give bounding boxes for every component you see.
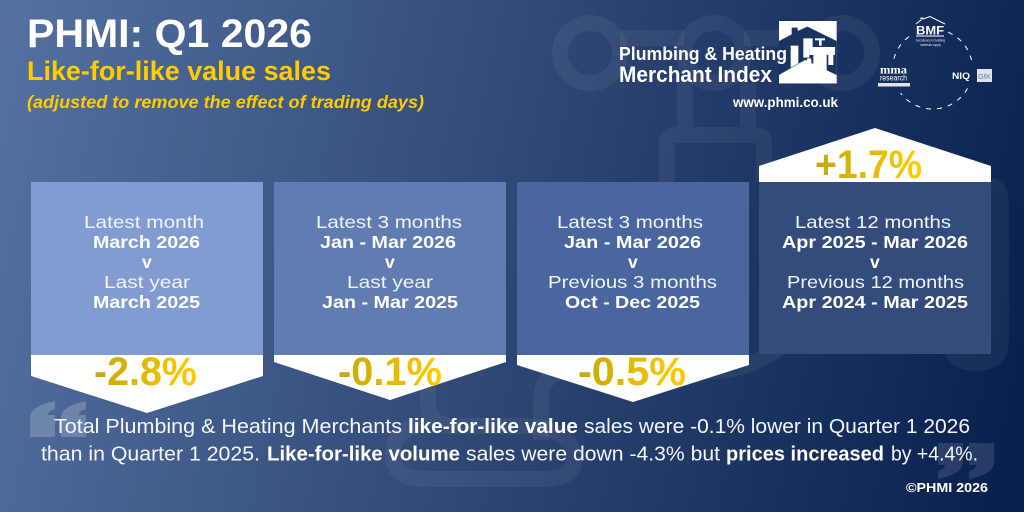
logo: BMF: Excellence in building: [916, 38, 945, 42]
panel text: Latest 3 months: [557, 212, 703, 232]
panel: latest 3 months v last year: Last year: [347, 272, 433, 292]
subtitle: Like-for-like value sales: [27, 56, 331, 86]
summary text: by +4.4%.: [891, 442, 978, 466]
background pipe watermark: [393, 23, 872, 479]
panel: latest 12 months: v: [870, 252, 880, 272]
value: -0.5%: [578, 350, 686, 394]
panel: latest month: March 2026: [93, 232, 200, 252]
value arrow: [31, 355, 263, 413]
copyright: ©PHMI 2026: [906, 480, 988, 495]
panel text: Latest month: [84, 212, 204, 232]
logo wordmark: Plumbing & Heating: [619, 43, 787, 64]
value: +1.7%: [815, 143, 922, 187]
logo: BMF: materials supply: [920, 43, 941, 47]
panel: latest 3 months v last year: Jan - Mar 2025: [322, 292, 458, 312]
summary text: [41, 415, 978, 466]
summary text: prices increased: [726, 442, 884, 466]
website: www.phmi.co.uk: [732, 95, 838, 110]
value: -0.1%: [338, 350, 442, 394]
panel: latest 12 months: Previous 12 months: [787, 272, 964, 292]
summary text: Like-for-like volume: [267, 442, 460, 466]
logo: BMF: [916, 16, 945, 47]
panel: latest 3 months v previous 3 months: v: [628, 252, 638, 272]
icon: closing quote mark: [938, 443, 994, 479]
panel: latest 12 months: [759, 128, 991, 354]
subtitle note: (adjusted to remove the effect of trading days): [27, 92, 424, 112]
panel: latest 3 months v last year: [274, 182, 506, 400]
panel background: [517, 182, 749, 355]
logo: NIQ GfK: [952, 69, 992, 82]
panel: latest 12 months: Apr 2025 - Mar 2026: [782, 232, 968, 252]
value arrow: [517, 355, 749, 402]
value arrow: [274, 355, 506, 400]
panel: latest month: Last year: [104, 272, 190, 292]
panel background: [31, 182, 263, 355]
summary text: like-for-like value: [408, 415, 578, 438]
logo: BMF: BMF: [916, 26, 944, 38]
panel: latest month: March 2025: [93, 292, 200, 312]
panel: latest 3 months v last year: Jan - Mar 2026: [320, 232, 456, 252]
panel text: Latest 12 months: [795, 212, 951, 232]
panel background: [759, 182, 991, 354]
icon: house and tap: [779, 21, 837, 83]
panel: latest 3 months v previous 3 months: [517, 182, 749, 402]
panel: latest month: [31, 182, 263, 413]
summary text: than in Quarter 1 2025.: [41, 442, 260, 466]
panel: latest 12 months: Apr 2024 - Mar 2025: [782, 292, 968, 312]
logo: NIQ GfK: NIQ: [952, 71, 970, 81]
panel: latest month: v: [142, 252, 152, 272]
partner logos ring: [878, 16, 992, 109]
panel: latest 3 months v previous 3 months: Oct - Dec 2025: [565, 292, 700, 312]
logo: mma research: mma: [880, 62, 907, 76]
background pipe fitting: [940, 177, 1009, 371]
summary text: sales were down -4.3% but: [466, 442, 720, 466]
value arrow: [759, 128, 991, 182]
panel: latest 3 months v last year: v: [385, 252, 395, 272]
value: -2.8%: [94, 350, 197, 394]
summary text: Total Plumbing & Heating Merchants: [54, 415, 402, 438]
panel text: Latest 3 months: [316, 212, 462, 232]
summary text: sales were -0.1% lower in Quarter 1 2026: [584, 415, 970, 438]
logo: Plumbing and Heating Merchant Index: Merchant Index: [619, 62, 773, 87]
logo: Plumbing and Heating Merchant Index: [619, 21, 838, 110]
icon: opening quote mark: [30, 401, 86, 437]
logo: NIQ GfK: GfK: [978, 74, 991, 81]
dashed ring: [894, 32, 972, 109]
panel: latest 3 months v previous 3 months: Jan - Mar 2026: [564, 232, 701, 252]
panel: latest 3 months v previous 3 months: Previous 3 months: [548, 272, 717, 292]
panel background: [274, 182, 506, 355]
logo: mma research: [878, 62, 910, 86]
title: PHMI: Q1 2026: [27, 12, 312, 56]
logo: mma research: research: [880, 74, 907, 82]
